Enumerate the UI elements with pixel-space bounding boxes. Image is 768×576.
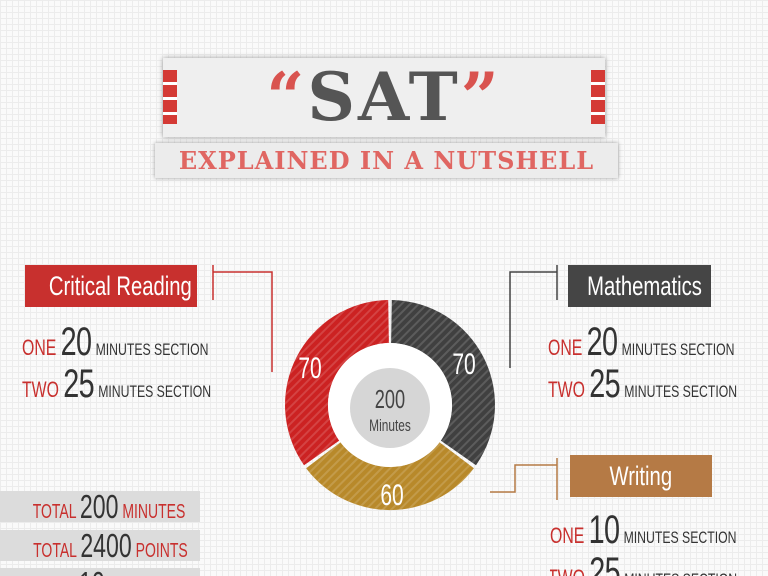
totals	[0, 491, 200, 576]
label: Mathematics	[568, 265, 711, 307]
label: Writing	[570, 455, 712, 497]
label: Mathematics: Mathematics	[587, 271, 702, 301]
subtitle box: EXPLAINED IN A NUTSHELL	[179, 146, 594, 175]
label: Writing: Writing	[610, 461, 672, 491]
mathematics rows: TWO25 MINUTES SECTION	[548, 362, 737, 406]
donut chart: 70	[298, 353, 322, 385]
donut chart: 200	[375, 385, 405, 414]
title box	[163, 58, 605, 137]
donut chart: 60	[380, 480, 404, 512]
mathematics rows: ONE20 MINUTES SECTION	[548, 320, 734, 364]
title text: “SAT”	[266, 58, 502, 136]
writing rows	[550, 508, 737, 576]
critical reading rows	[22, 320, 211, 406]
donut chart: 70	[452, 349, 476, 381]
label: Critical Reading: Critical Reading	[49, 271, 192, 301]
mathematics rows	[548, 320, 737, 406]
title bars right	[591, 70, 605, 124]
writing rows: ONE10 MINUTES SECTION	[550, 508, 736, 552]
critical reading rows: ONE20 MINUTES SECTION	[22, 320, 208, 364]
label: Critical Reading	[25, 265, 197, 307]
title bars left	[163, 70, 177, 124]
donut chart: Minutes	[369, 417, 411, 436]
critical reading rows: TWO25 MINUTES SECTION	[22, 362, 211, 406]
